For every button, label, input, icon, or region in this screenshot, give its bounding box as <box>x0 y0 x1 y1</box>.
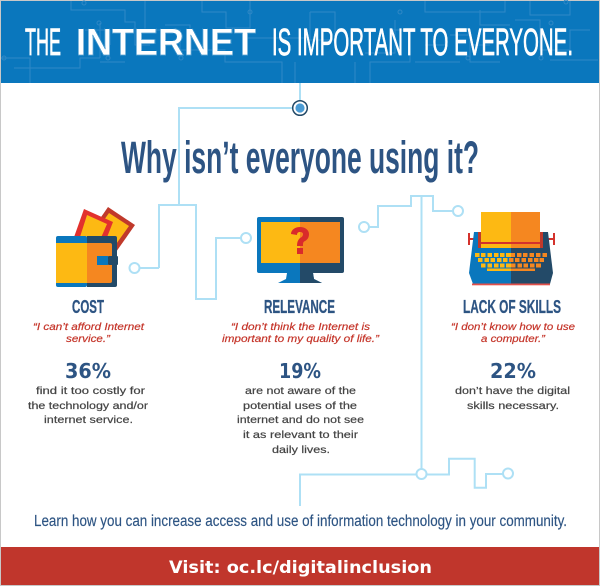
quote: lack of skills: a computer.” <box>481 334 546 345</box>
quote: cost: service.” <box>66 334 111 345</box>
panel: cost <box>28 207 149 426</box>
description: lack of skills: don’t have the digital <box>455 386 570 397</box>
heading: cost: COST <box>72 297 104 317</box>
panel: relevance <box>222 217 380 456</box>
stat: 22%: 22% <box>490 359 536 383</box>
quote: cost <box>33 322 145 345</box>
stat: 19%: 19% <box>279 359 321 383</box>
description: relevance: daily lives. <box>272 445 330 456</box>
heading: relevance: RELEVANCE <box>264 297 335 317</box>
quote: relevance: “I don’t think the Internet is <box>231 322 370 333</box>
description: relevance <box>237 386 365 456</box>
description: lack of skills <box>455 386 570 412</box>
quote: relevance <box>222 322 380 345</box>
title: the internet is important to everyone <box>25 22 573 64</box>
description: relevance: it as relevant to their <box>243 430 359 441</box>
description: relevance: internet and do not see <box>237 415 365 426</box>
description: lack of skills: skills necessary. <box>467 401 559 412</box>
description: cost: find it too costly for <box>36 386 146 397</box>
title: the internet is important to everyone: INTERNET <box>76 22 256 64</box>
circuit connector lines <box>130 83 513 506</box>
icon: computer monitor with question mark <box>257 217 344 283</box>
quote: lack of skills <box>451 322 575 345</box>
header banner <box>1 0 599 83</box>
icon: wallet with money <box>56 207 135 287</box>
description: cost <box>28 386 149 426</box>
title: the internet is important to everyone: THE <box>25 22 61 64</box>
quote: relevance: important to my quality of life.” <box>222 334 380 345</box>
description: cost: the technology and/or <box>28 401 149 412</box>
icon: connector node <box>293 101 307 115</box>
description: cost: internet service. <box>44 415 133 426</box>
description: relevance: potential uses of the <box>243 401 358 412</box>
keys <box>475 253 511 271</box>
icon: typewriter <box>468 212 555 285</box>
footer banner <box>1 547 599 585</box>
description: relevance: are not aware of the <box>245 386 357 397</box>
panel: lack of skills <box>451 212 575 412</box>
title: the internet is important to everyone: INTERNET <box>76 22 256 64</box>
stat: 36%: 36% <box>65 359 111 383</box>
footer banner: Visit: oc.lc/digitalinclusion <box>169 558 432 578</box>
quote: lack of skills: “I don’t know how to use <box>451 322 575 333</box>
quote: cost: “I can’t afford Internet <box>33 322 145 333</box>
